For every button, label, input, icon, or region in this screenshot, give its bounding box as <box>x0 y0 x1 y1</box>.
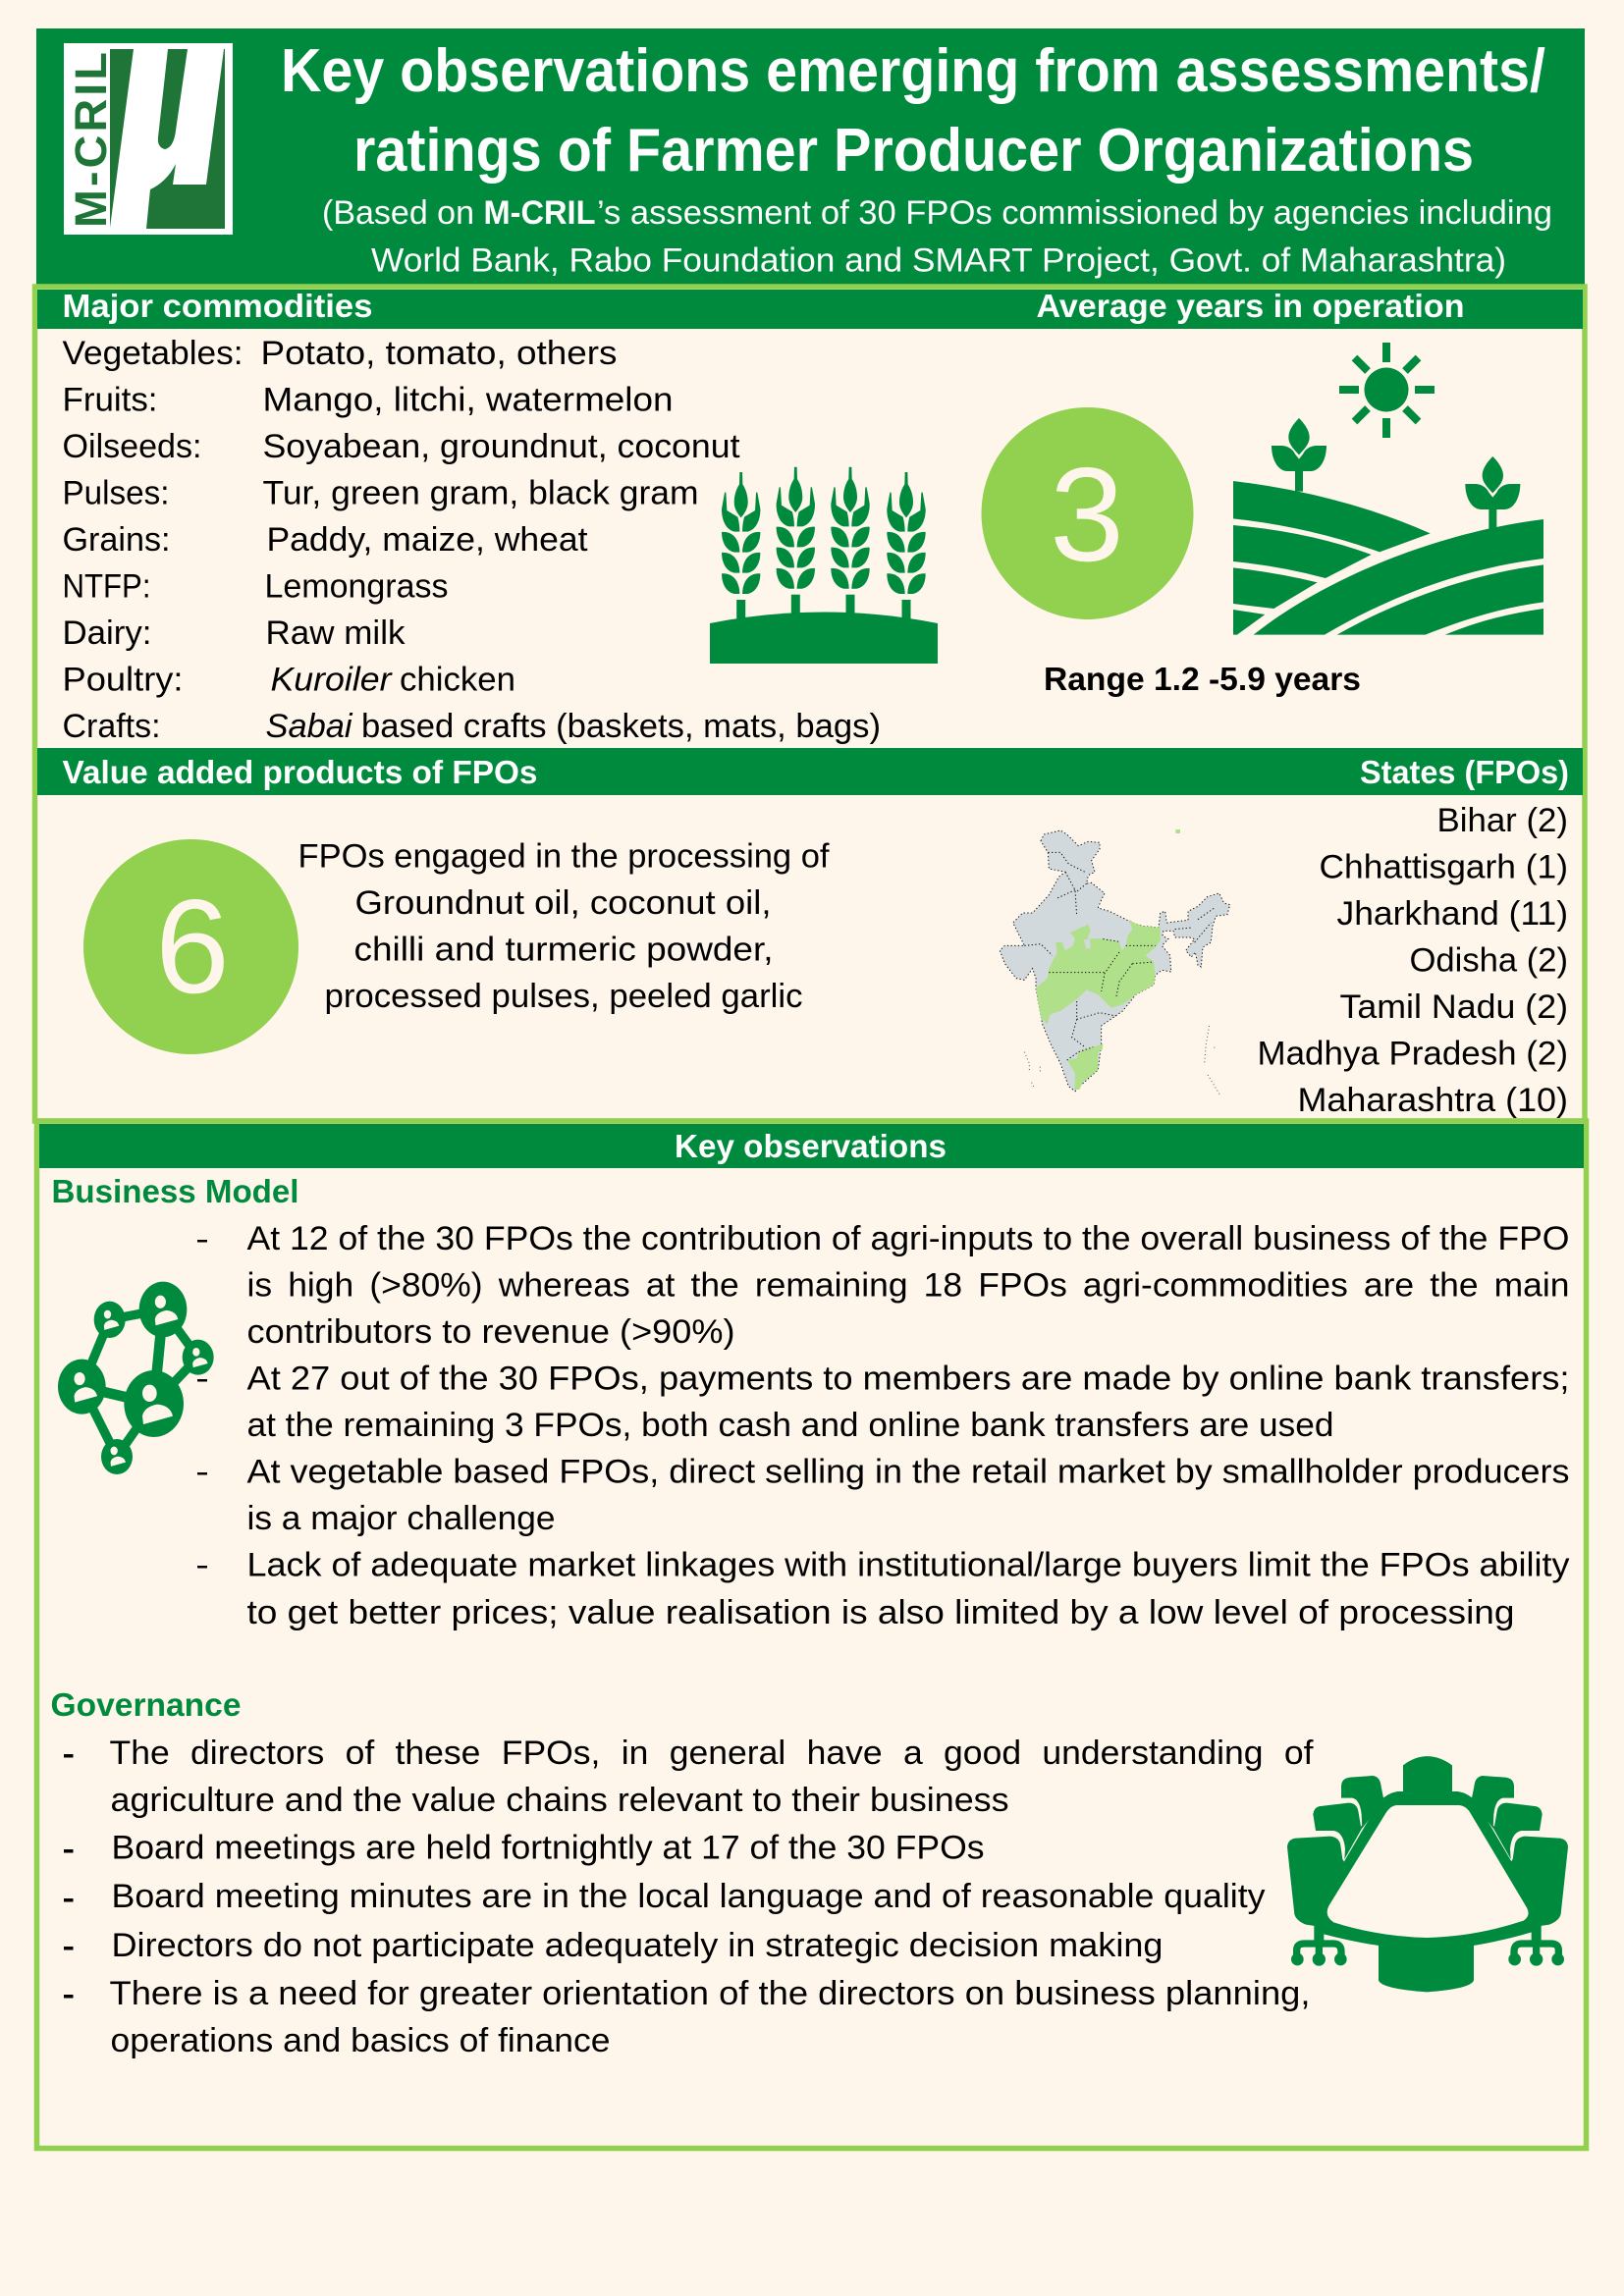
section bar: key observations: Key observations <box>675 1129 947 1165</box>
title: ratings of Farmer Producer Organizations <box>353 116 1474 185</box>
commodity list: Fruits: <box>63 381 157 418</box>
subtitle: World Bank, Rabo Foundation and SMART Project, Govt. of Maharashtra) <box>371 241 1506 279</box>
value added text: chilli and turmeric powder, <box>353 931 774 968</box>
stat circle: 3 years <box>982 407 1194 619</box>
states list: Odisha (2) <box>1410 942 1568 980</box>
stat circle: 6 FPOs <box>83 839 298 1054</box>
states list: Chhattisgarh (1) <box>1320 848 1568 885</box>
governance bullets: Board meetings are held fortnightly at 17 of the 30 FPOs <box>112 1830 984 1867</box>
governance bullets: Directors do not participate adequately in strategic decision making <box>112 1927 1163 1964</box>
icon: wheat field <box>710 467 938 664</box>
section bar: value added products and states <box>37 748 1583 795</box>
states list: Madhya Pradesh (2) <box>1257 1035 1568 1072</box>
governance bullets: Board meeting minutes are in the local language and of reasonable quality <box>112 1878 1265 1915</box>
section bar: value added products and states: Value added products of FPOs <box>63 755 538 791</box>
title <box>281 36 1545 185</box>
business model bullets: contributors to revenue (>90%) <box>247 1313 734 1351</box>
governance bullets: agriculture and the value chains relevant to their business <box>110 1782 1009 1819</box>
value added text: FPOs engaged in the processing of <box>298 838 830 876</box>
commodity list: Mango, litchi, watermelon <box>263 381 674 418</box>
logo: M-CRIL <box>64 43 233 235</box>
commodity list: Dairy: <box>63 614 151 652</box>
governance bullets <box>64 1735 1314 2059</box>
commodity list: Pulses: <box>63 475 169 512</box>
stat circle: 6 FPOs: 6 <box>155 872 230 1021</box>
governance bullets: There is a need for greater orientation of the directors on business planning, <box>110 1975 1310 2012</box>
governance bullets: The directors of these FPOs, in general have a good understanding of <box>110 1735 1314 1772</box>
states list <box>1257 802 1568 1119</box>
commodity list: Oilseeds: <box>63 428 202 465</box>
commodity list: Raw milk <box>265 614 406 652</box>
commodity list: Paddy, maize, wheat <box>267 521 588 559</box>
commodity list: Crafts: <box>63 708 161 745</box>
states list: Maharashtra (10) <box>1298 1082 1568 1119</box>
stat circle: 3 years: 3 <box>1050 440 1124 589</box>
governance bullets: operations and basics of finance <box>110 2022 611 2059</box>
title: Key observations emerging from assessments/ <box>281 36 1545 105</box>
business model bullets: Lack of adequate market linkages with institutional/large buyers limit the FPOs ability <box>247 1547 1570 1584</box>
value added text: Groundnut oil, coconut oil, <box>355 884 772 922</box>
range caption: Range 1.2 -5.9 years <box>1044 662 1361 698</box>
commodity list: Lemongrass <box>265 567 448 605</box>
icon: sun over farmland <box>1233 343 1543 635</box>
section bar: value added products and states: States (FPOs) <box>1360 755 1569 791</box>
value added text: processed pulses, peeled garlic <box>324 978 803 1015</box>
commodity list: Soyabean, groundnut, coconut <box>263 428 740 465</box>
commodity list: Tur, green gram, black gram <box>263 475 699 512</box>
subtitle: ’s assessment of 30 FPOs commissioned by agencies including <box>597 194 1552 232</box>
commodity list: Potato, tomato, others <box>261 335 617 372</box>
heading: business model: Business Model <box>51 1174 298 1210</box>
commodity list: Vegetables: <box>63 335 244 372</box>
icon: boardroom table <box>1287 1756 1568 1992</box>
business model bullets: At 12 of the 30 FPOs the contribution of agri-inputs to the overall business of the FPO <box>247 1220 1570 1257</box>
business model bullets: is a major challenge <box>247 1500 556 1537</box>
panel: commodities, years, value added, states <box>35 287 1585 1121</box>
icon: people network <box>58 1282 214 1474</box>
commodity list: based crafts (baskets, mats, bags) <box>361 708 881 745</box>
subtitle <box>322 194 1552 279</box>
map of India <box>1000 829 1230 1096</box>
states list: Tamil Nadu (2) <box>1339 988 1568 1026</box>
commodity list: NTFP: <box>63 567 151 605</box>
section bar: major commodities and average years <box>37 289 1583 329</box>
section bar: key observations <box>39 1124 1584 1168</box>
business model bullets <box>197 1220 1570 1631</box>
commodity list: Kuroiler <box>271 662 393 699</box>
section bar: major commodities and average years: Major commodities <box>63 289 373 325</box>
business model bullets: At 27 out of the 30 FPOs, payments to members are made by online bank transfers; <box>247 1361 1569 1398</box>
business model bullets: At vegetable based FPOs, direct selling in the retail market by smallholder producers <box>247 1453 1570 1490</box>
heading: governance: Governance <box>51 1687 242 1724</box>
subtitle: (Based on <box>322 194 474 232</box>
states list: Bihar (2) <box>1437 802 1568 839</box>
panel: key observations <box>37 1121 1587 2148</box>
subtitle: M-CRIL <box>483 194 595 232</box>
business model bullets: to get better prices; value realisation is also limited by a low level of processing <box>247 1594 1514 1631</box>
commodity list <box>63 335 881 745</box>
value added text <box>298 838 830 1015</box>
header banner <box>36 28 1585 286</box>
commodity list: Grains: <box>63 521 171 559</box>
business model bullets: is high (>80%) whereas at the remaining 18 FPOs agri-commodities are the main <box>247 1266 1569 1304</box>
logo: M-CRIL: M-CRIL <box>66 49 116 228</box>
commodity list: Poultry: <box>63 662 183 699</box>
states list: Jharkhand (11) <box>1337 895 1568 933</box>
section bar: major commodities and average years: Average years in operation <box>1037 289 1465 325</box>
commodity list: chicken <box>400 662 515 699</box>
commodity list: Sabai <box>265 708 353 745</box>
business model bullets: at the remaining 3 FPOs, both cash and online bank transfers are used <box>247 1407 1333 1444</box>
